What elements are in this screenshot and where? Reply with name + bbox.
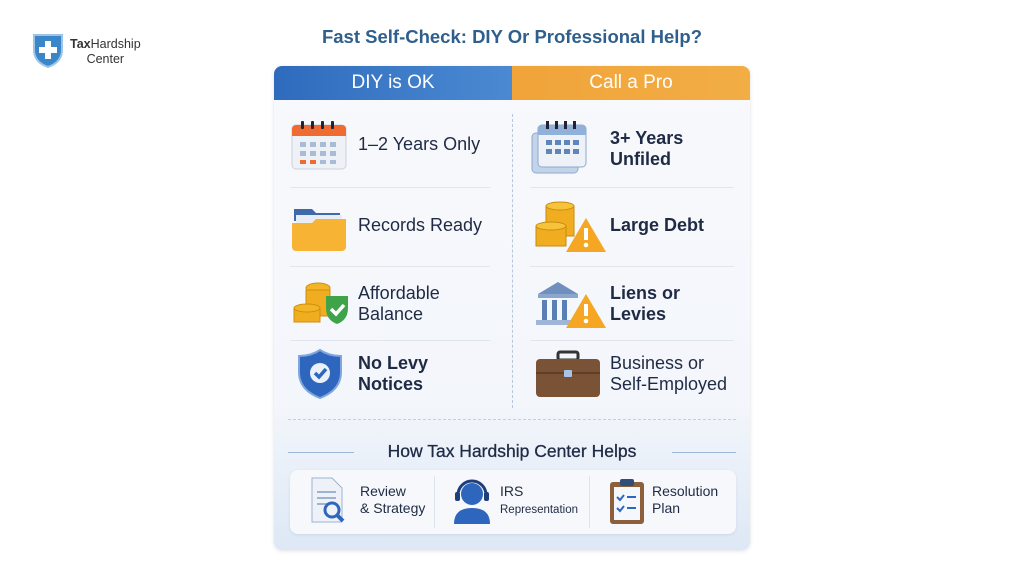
item: No Levy Notices: No Levy <box>358 353 428 373</box>
item: Liens or Levies: Levies <box>610 304 666 324</box>
item: 3+ Years Unfiled: Unfiled <box>610 149 671 169</box>
service: Resolution Plan: Plan <box>652 500 680 516</box>
logo text <box>70 37 141 66</box>
icon: blue shield <box>298 348 342 399</box>
service: IRS Representation: Representation <box>500 504 578 516</box>
item: Liens or Levies: Liens or <box>610 283 680 303</box>
column divider <box>512 114 513 408</box>
service: Review & Strategy: Review <box>360 483 406 499</box>
service: Resolution Plan: Resolution <box>652 483 718 499</box>
section heading: How Tax Hardship Center Helps: How Tax Hardship Center Helps <box>388 441 636 461</box>
icon: calendar <box>292 121 346 170</box>
item: Records Ready: Records Ready <box>358 215 482 235</box>
icon: bank with warning <box>536 282 606 328</box>
logo text: Center <box>87 52 124 66</box>
item: 1-2 Years Only <box>292 121 480 170</box>
header: Call a Pro: Call a Pro <box>589 72 673 93</box>
item: Business or Self-Employed <box>536 350 727 397</box>
icon: shield logo <box>33 34 63 68</box>
item: 3+ Years Unfiled: 3+ Years <box>610 128 683 148</box>
logo text: TaxHardship <box>70 37 141 51</box>
title: Fast Self-Check: DIY Or Professional Help? <box>322 26 702 47</box>
item: Large Debt: Large Debt <box>610 215 704 235</box>
service: Review & Strategy <box>312 478 426 522</box>
header: DIY is OK: DIY is OK <box>351 72 435 93</box>
header: DIY is OK <box>274 66 512 100</box>
item: Business or Self-Employed: Self-Employed <box>610 374 727 394</box>
item: Business or Self-Employed: Business or <box>610 353 704 373</box>
icon: briefcase <box>536 350 600 397</box>
item: No Levy Notices <box>298 348 428 399</box>
service: Review & Strategy: & Strategy <box>360 500 425 516</box>
icon: clipboard <box>610 479 644 524</box>
logo <box>33 34 141 68</box>
panel: services <box>290 470 736 534</box>
item: Records Ready <box>292 209 482 251</box>
item: Affordable Balance <box>294 282 440 324</box>
icon: headset agent <box>454 480 490 524</box>
icon: coins with shield <box>294 282 348 324</box>
icon: coins with warning <box>536 202 606 252</box>
header: Call a Pro <box>512 66 750 100</box>
icon: document magnifier <box>312 478 344 522</box>
item: Liens or Levies <box>536 282 680 328</box>
item: Affordable Balance: Affordable <box>358 283 440 303</box>
item: Affordable Balance: Balance <box>358 304 423 324</box>
service: Resolution Plan <box>610 479 718 524</box>
item: Large Debt <box>536 202 704 252</box>
item: 3+ Years Unfiled <box>532 121 683 174</box>
main card <box>274 66 750 550</box>
item: No Levy Notices: Notices <box>358 374 423 394</box>
item: 1-2 Years Only: 1–2 Years Only <box>358 134 480 154</box>
service: IRS Representation <box>454 480 578 524</box>
service: IRS Representation: IRS <box>500 483 523 499</box>
icon: folder <box>292 209 346 251</box>
icon: stacked calendar <box>532 121 586 174</box>
